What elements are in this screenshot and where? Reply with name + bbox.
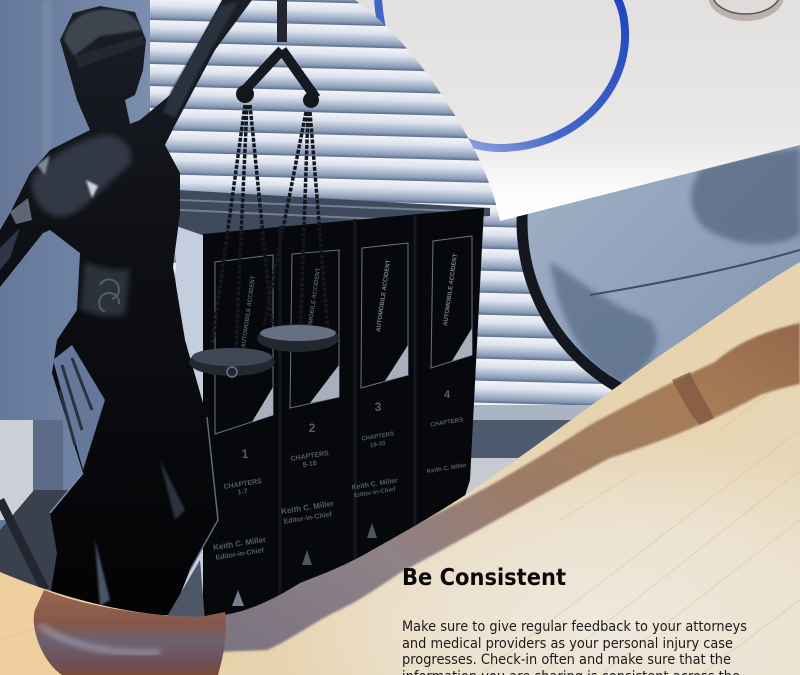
book cover text: AUTOMOBILE ACCIDENT (306, 267, 322, 340)
window sill (462, 405, 592, 498)
book cover text: Editor-in-Chief (283, 511, 333, 526)
balance scale (189, 0, 339, 377)
book cover text: Editor-in-Chief (354, 487, 397, 499)
book cover text (213, 253, 468, 562)
book cover text: 1-7 (237, 488, 248, 497)
book cover label frames (215, 236, 472, 434)
book cover text: 3 (375, 400, 382, 414)
book cover text: CHAPTERS (223, 478, 263, 491)
book cover text: Keith C. Miller (281, 499, 335, 516)
book cover text: Keith C. Miller (213, 535, 267, 552)
white paper panel with stethoscope (340, 0, 800, 225)
book cover text: 1 (242, 447, 249, 461)
book cover text: AUTOMOBILE ACCIDENT (443, 253, 459, 326)
body text: Make sure to give regular feedback to your attorneys (402, 619, 747, 635)
book cover text: 8-18 (302, 460, 317, 469)
book cover text: AUTOMOBILE ACCIDENT (241, 275, 257, 348)
book cover text: Keith C. Miller (427, 463, 468, 475)
book cover text: 2 (309, 421, 316, 435)
icon: stethoscope tube (378, 0, 625, 148)
book cover text: Editor-in-Chief (215, 547, 265, 562)
book cover text: CHAPTERS (430, 417, 464, 429)
body text: progresses. Check-in often and make sure that the (402, 652, 731, 668)
law books (176, 190, 490, 640)
gavel handle (210, 323, 800, 652)
book cover text: 19-33 (370, 441, 387, 449)
section heading: Be Consistent (402, 565, 566, 591)
body text (402, 619, 747, 675)
globe (516, 145, 800, 390)
wall (0, 0, 150, 600)
window blinds (150, 0, 630, 420)
book cover text: CHAPTERS (290, 450, 330, 463)
body text: and medical providers as your personal injury case (402, 636, 733, 652)
book cover text: CHAPTERS (361, 431, 395, 443)
icon: stethoscope chest piece (708, 0, 784, 21)
statue of lady justice (0, 0, 252, 620)
statue wooden base (34, 590, 226, 675)
statue highlights (32, 135, 131, 217)
book cover text: Keith C. Miller (351, 477, 399, 492)
book cover label accents (252, 328, 472, 422)
book cover text: AUTOMOBILE ACCIDENT (376, 259, 392, 332)
book cover text: 4 (444, 389, 451, 401)
